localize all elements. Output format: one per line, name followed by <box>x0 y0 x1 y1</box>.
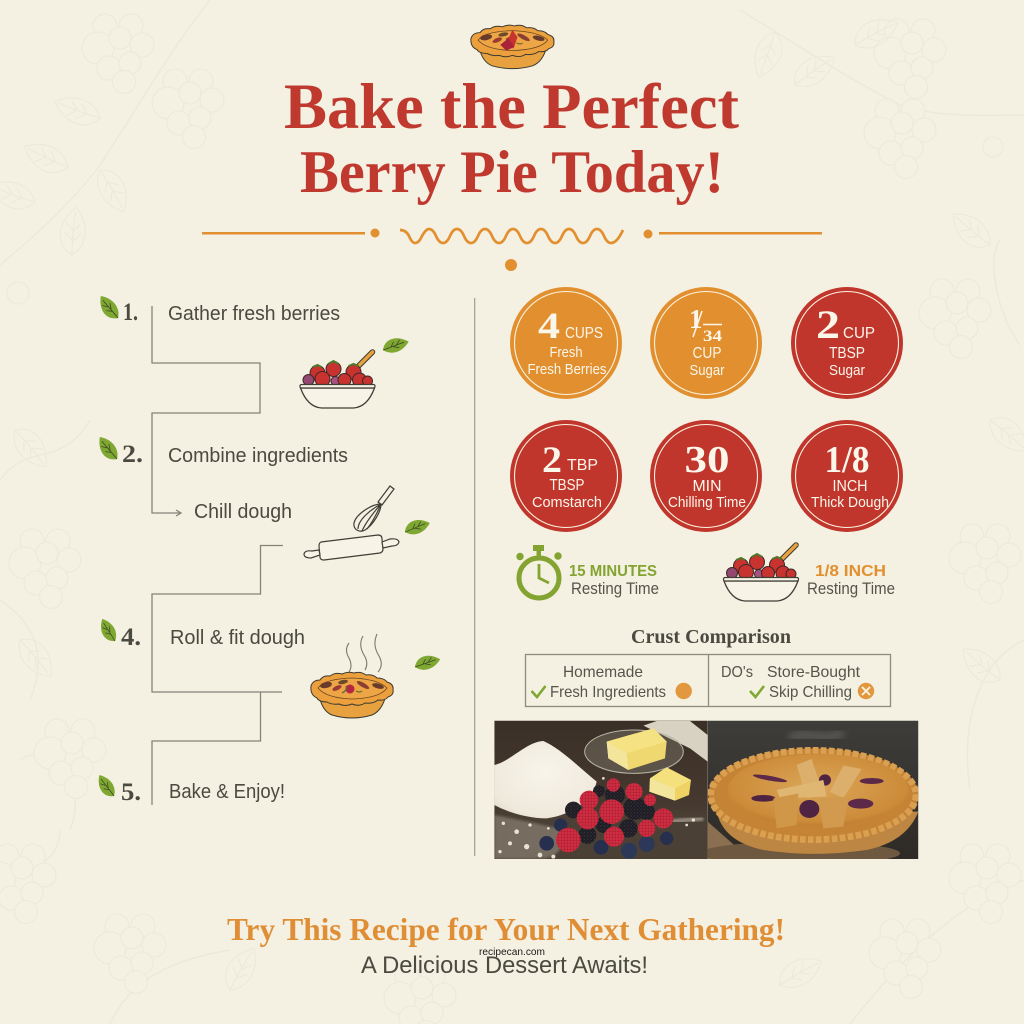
badge: 4 cups fresh berries: Fresh Berries <box>528 361 606 378</box>
title: Bake the Perfect <box>284 71 739 143</box>
title <box>284 71 739 205</box>
badge: 30 min chilling time: MIN <box>692 478 722 495</box>
icon: berry bowl <box>300 352 375 408</box>
icon: leaf <box>402 516 432 538</box>
step 5: 5. <box>121 779 141 806</box>
badge: 2 cup tbsp sugar: TBSP <box>829 345 865 362</box>
icon: whisk <box>354 486 394 531</box>
comparison table <box>526 654 890 706</box>
step 1: Gather fresh berries <box>168 303 340 325</box>
badge: 4 cups fresh berries <box>510 287 622 399</box>
badge: 2 cup tbsp sugar: CUP <box>843 325 875 342</box>
comparison table: Store-Bought <box>767 664 861 681</box>
comparison table: DO's <box>721 664 753 681</box>
icon: rolling pin <box>304 535 399 560</box>
badge: fraction cup sugar <box>650 287 762 399</box>
badge: fraction cup sugar: 1 <box>689 304 702 334</box>
badge: fraction cup sugar: Sugar <box>690 362 725 379</box>
icon: stopwatch <box>516 545 562 598</box>
photo: ingredients <box>494 721 708 859</box>
badge: 1/8 inch thick dough: Thick Dough <box>811 494 889 511</box>
badge: 1/8 inch thick dough: INCH <box>832 478 868 495</box>
panel: measurement badges <box>510 287 903 532</box>
badge: fraction cup sugar: 34 <box>703 328 722 345</box>
badge: 2 tbsp cornstarch: Comstarch <box>532 494 602 511</box>
step 2: 2. <box>122 441 143 468</box>
title: Berry Pie Today! <box>300 139 724 205</box>
icon: pie <box>311 672 393 718</box>
icon: pie at top <box>471 25 554 69</box>
footer call to action: Try This Recipe for Your Next Gathering! <box>227 911 785 947</box>
icon: leaf <box>413 652 442 673</box>
step: chill dough: Chill dough <box>194 501 292 523</box>
heading: crust comparison: Crust Comparison <box>631 627 791 648</box>
step 1 <box>94 292 340 326</box>
step 4: 4. <box>121 624 141 651</box>
thickness note: 1/8 INCH <box>815 563 886 580</box>
resting time note: Resting Time <box>571 580 659 598</box>
badge: 2 cup tbsp sugar: 2 <box>816 302 840 347</box>
badge: 2 tbsp cornstarch: TBP <box>567 457 598 474</box>
resting time note: 15 MINUTES <box>569 563 657 580</box>
resting time note <box>569 563 659 598</box>
comparison table: Homemade <box>563 664 643 681</box>
badge: 2 cup tbsp sugar <box>791 287 903 399</box>
badge: 2 cup tbsp sugar: Sugar <box>829 362 865 379</box>
step 5 <box>93 772 285 806</box>
panel: steps flow <box>93 292 442 806</box>
badge: 4 cups fresh berries: CUPS <box>565 325 603 342</box>
title divider <box>202 228 822 271</box>
step 1: 1. <box>123 299 138 326</box>
step 2: Combine ingredients <box>168 445 348 467</box>
step 4 <box>96 616 305 651</box>
icon: steam <box>346 634 381 672</box>
badge: 30 min chilling time: 30 <box>684 439 730 481</box>
badge: 4 cups fresh berries: 4 <box>538 306 560 347</box>
badge: 2 tbsp cornstarch: 2 <box>542 440 562 481</box>
badge: 30 min chilling time: Chilling Time <box>668 494 746 511</box>
thickness note <box>807 563 895 598</box>
photo: baked pie <box>700 721 918 865</box>
icon: leaf <box>381 334 411 356</box>
center divider line <box>474 298 475 856</box>
step 5: Bake & Enjoy! <box>169 781 285 803</box>
badge: fraction cup sugar: CUP <box>692 345 722 362</box>
comparison table: Skip Chilling <box>769 684 852 701</box>
step 4: Roll & fit dough <box>170 627 305 649</box>
footer call to action: A Delicious Dessert Awaits! <box>361 952 648 979</box>
badge: 2 tbsp cornstarch: TBSP <box>550 477 584 494</box>
badge: 1/8 inch thick dough: 1/8 <box>824 439 870 481</box>
watermark: recipecan.com <box>479 947 545 958</box>
flow connector lines <box>152 306 283 805</box>
badge: 4 cups fresh berries: Fresh <box>550 344 582 361</box>
badge: 30 min chilling time <box>650 420 762 532</box>
icon: berry bowl small <box>724 545 798 601</box>
badge: 2 tbsp cornstarch <box>510 420 622 532</box>
comparison table: Fresh Ingredients <box>550 684 666 701</box>
badge: 1/8 inch thick dough <box>791 420 903 532</box>
step 2 <box>93 433 348 468</box>
footer call to action <box>227 911 785 979</box>
thickness note: Resting Time <box>807 580 895 598</box>
